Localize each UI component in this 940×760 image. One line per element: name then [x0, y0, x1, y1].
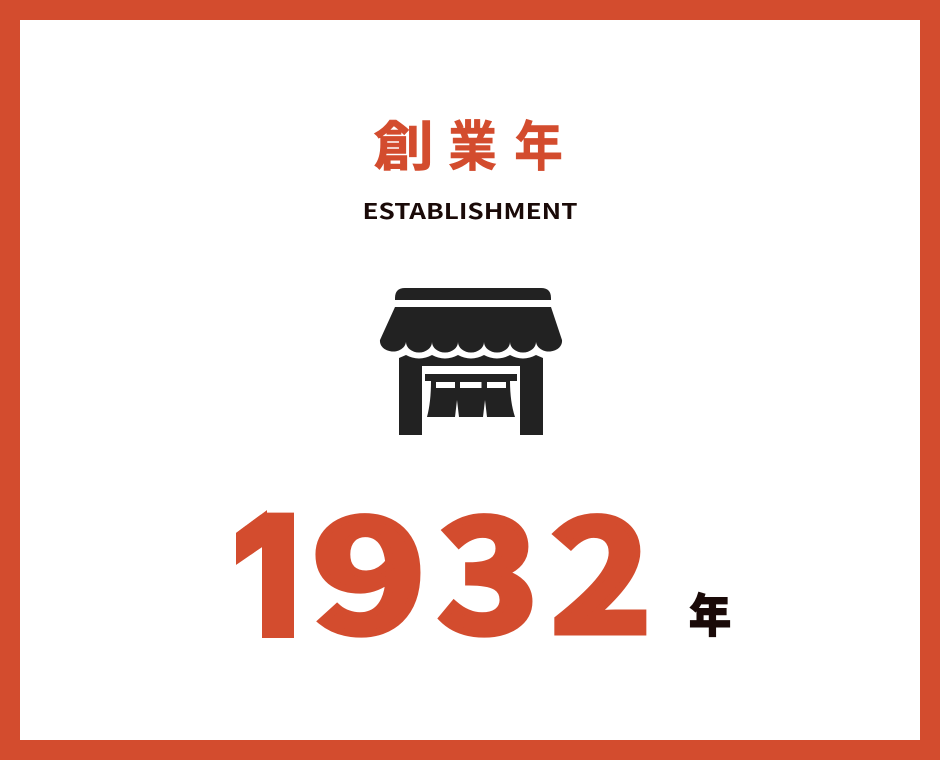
- year number: 1932: [236, 510, 646, 638]
- heading: 創業年: 年: [514, 102, 563, 181]
- heading: 創業年: 業: [448, 102, 497, 181]
- heading: 創業年: 創: [373, 102, 434, 182]
- year number: 1932: 2: [551, 455, 651, 676]
- noren curtain: [425, 374, 517, 417]
- shop body and doorway: [399, 355, 543, 435]
- awning with scallops: [380, 307, 562, 353]
- heading: 創業年: [373, 102, 563, 182]
- year number: 1932: 3: [438, 455, 538, 676]
- subheading: ESTABLISHMENT: ESTABLISHMENT: [362, 195, 578, 226]
- unit: 年: 年: [689, 579, 731, 646]
- year number: 1932: 1: [204, 455, 340, 677]
- icon: shop with awning and noren: [380, 288, 562, 435]
- year number: 1932: 9: [312, 455, 426, 677]
- awning top bar: [395, 288, 551, 300]
